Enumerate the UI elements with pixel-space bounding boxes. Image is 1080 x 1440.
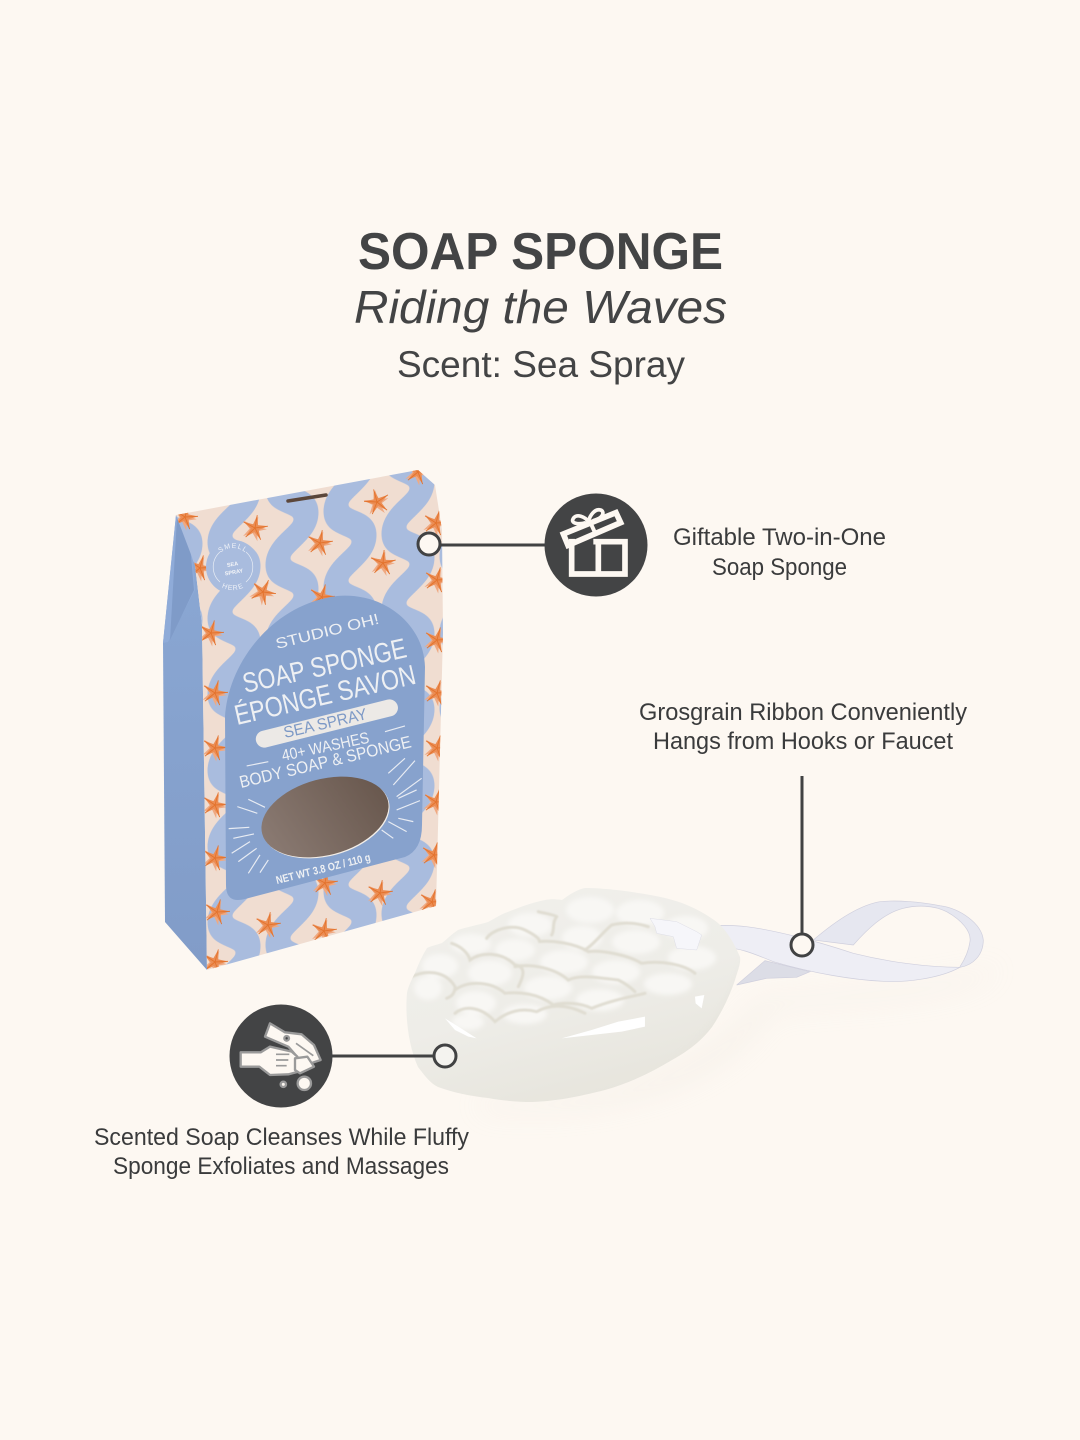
scent line: Scent: Sea Spray: [397, 344, 685, 385]
label: Hangs from Hooks or Faucet: [653, 728, 953, 755]
connector line: [330, 1045, 456, 1067]
gloss highlights: [445, 995, 704, 1038]
sunburst rays: [229, 726, 422, 873]
subtitle: Riding the Waves: Riding the Waves: [354, 281, 727, 333]
label: Giftable Two-in-One: [673, 524, 886, 551]
box side panel: [163, 515, 207, 970]
back strand: [737, 961, 810, 985]
badge: smell here: HERE: [222, 583, 244, 590]
ribbon: [697, 901, 983, 985]
arch label panel: [225, 596, 425, 900]
label: Soap Sponge: [712, 554, 847, 581]
title: Soap Sponge: SOAP SPONGE: [358, 223, 723, 281]
loop: [813, 901, 983, 967]
scent pill: SEA SPRAY: [282, 706, 369, 742]
badge: smell here: SEA: [227, 561, 239, 569]
label: [94, 1124, 469, 1180]
label: [639, 699, 967, 755]
title block: [354, 223, 727, 385]
net weight: NET WT 3.8 OZ / 110 g: [275, 852, 372, 887]
label: [673, 524, 886, 581]
front band: [697, 925, 960, 982]
sponge crevices: [412, 912, 695, 1022]
badge: smell here: SMELL: [218, 543, 246, 552]
label: Scented Soap Cleanses While Fluffy: [94, 1124, 469, 1151]
body soap and sponge: BODY SOAP & SPONGE: [237, 732, 413, 792]
washes: 40+ WASHES: [280, 730, 371, 765]
badge: smell here: SPRAY: [224, 568, 244, 577]
product: soap sponge box: [163, 470, 443, 970]
brand: STUDIO OH!: [274, 611, 381, 653]
hang slot: [288, 495, 326, 501]
product: soap sponge with ribbon: [406, 888, 984, 1102]
window cut-out: [252, 763, 399, 872]
icon: gift box: [544, 494, 648, 596]
icon: washing hands: [230, 1004, 332, 1108]
connector line: [791, 776, 813, 956]
french heading: ÉPONGE SAVON: [231, 659, 419, 731]
callout: grosgrain ribbon: [639, 699, 967, 956]
badge: smell here: [206, 540, 255, 591]
soft shadow: [480, 965, 1000, 1112]
scent pill: [254, 698, 400, 749]
callout: giftable two-in-one: [418, 494, 886, 596]
connector line: [418, 533, 548, 555]
callout: scented soap: [94, 1004, 469, 1180]
box front with wave and starfish pattern: [176, 470, 443, 970]
soap body: [406, 888, 740, 1102]
label: Sponge Exfoliates and Massages: [113, 1153, 449, 1180]
ribbon knot: [650, 918, 702, 950]
label: Grosgrain Ribbon Conveniently: [639, 699, 967, 726]
sponge lump highlights: [414, 897, 716, 1030]
soap sponge heading: SOAP SPONGE: [240, 632, 409, 699]
